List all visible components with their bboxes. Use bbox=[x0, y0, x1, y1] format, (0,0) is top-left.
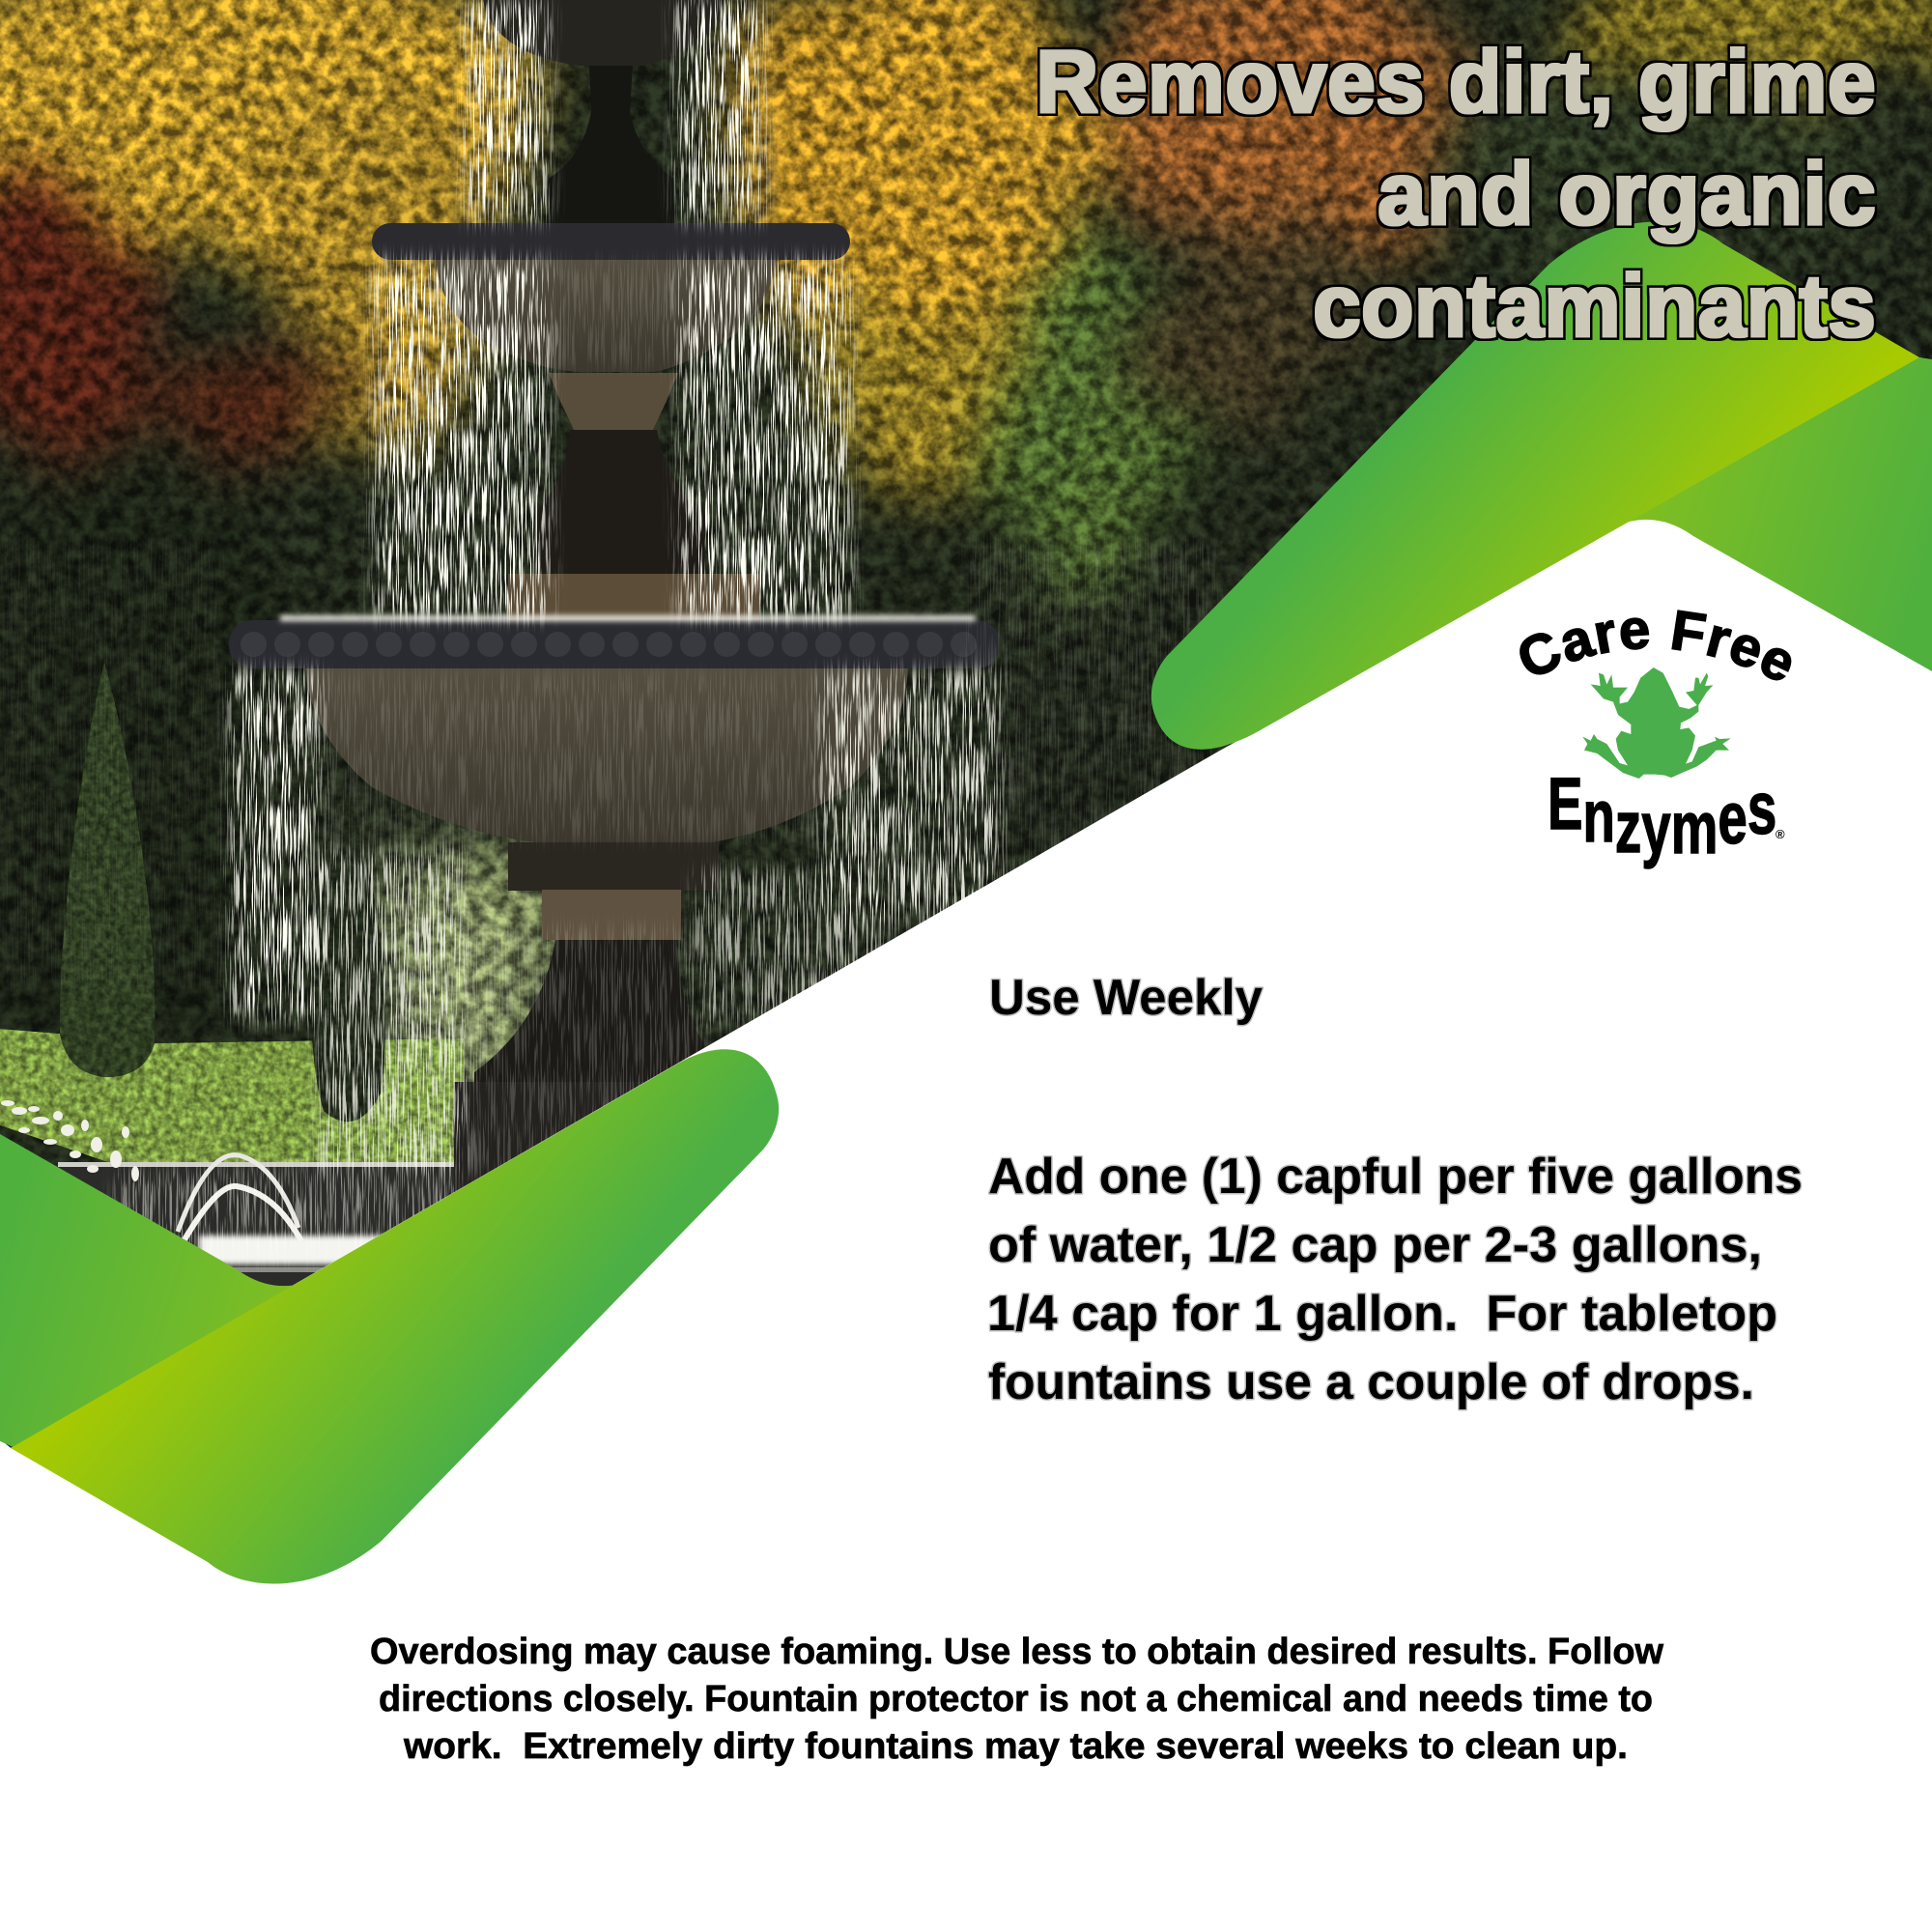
dosage text: of water, 1/2 cap per 2-3 gallons, bbox=[988, 1217, 1762, 1273]
front shape bbox=[11, 1049, 779, 1584]
usage instructions bbox=[987, 970, 1803, 1410]
back shape bbox=[1606, 352, 1932, 671]
pool bbox=[54, 1152, 454, 1286]
front shape bbox=[1151, 221, 1919, 750]
logo text: Enzymes: Enzymes bbox=[1548, 763, 1776, 869]
cypress tree bbox=[60, 662, 156, 1077]
middle rim bbox=[372, 223, 850, 260]
neck bbox=[508, 842, 719, 891]
falling water streaks bbox=[0, 0, 1217, 1256]
footer caution note: directions closely. Fountain protector is not a chemical and needs time to bbox=[379, 1679, 1653, 1719]
middle pedestal bbox=[549, 373, 678, 432]
footer caution note bbox=[370, 1632, 1663, 1767]
lower bowl bbox=[305, 667, 908, 842]
lower rim bbox=[229, 620, 1000, 668]
middle bowl bbox=[434, 256, 776, 372]
photo: autumn garden with tiered fountain bbox=[0, 0, 1932, 1448]
footer caution note: Overdosing may cause foaming. Use less to obtain desired results. Follow bbox=[370, 1632, 1663, 1672]
rim highlight bbox=[280, 615, 976, 621]
use weekly heading: Use Weekly bbox=[989, 970, 1263, 1026]
lower left green accent bbox=[0, 1049, 779, 1584]
upper stem bbox=[549, 66, 674, 224]
registered mark: ® bbox=[1776, 827, 1785, 841]
fountain bbox=[229, 0, 1000, 1208]
lower pedestal bbox=[542, 890, 681, 940]
rim beading bbox=[253, 632, 978, 657]
plinth bbox=[454, 1082, 724, 1208]
dosage text: 1/4 cap for 1 gallon. For tabletop bbox=[987, 1286, 1777, 1342]
dosage text: Add one (1) capful per five gallons bbox=[988, 1149, 1803, 1205]
textured garden elements bbox=[0, 662, 464, 1165]
title: Removes dirt, grime bbox=[1036, 33, 1876, 131]
icon: green frog bbox=[1582, 668, 1731, 779]
dosage text bbox=[987, 1149, 1803, 1410]
foliage background bbox=[0, 0, 1932, 1448]
title: and organic bbox=[1378, 145, 1876, 243]
dosage text: fountains use a couple of drops. bbox=[988, 1354, 1754, 1410]
footer caution note: work. Extremely dirty fountains may take several weeks to clean up. bbox=[403, 1726, 1628, 1767]
lawn bbox=[0, 1029, 464, 1165]
flared base bbox=[474, 940, 719, 1087]
title bbox=[1036, 33, 1876, 355]
logo text: Care Free: Care Free bbox=[1520, 610, 1791, 680]
upper right green accent bbox=[1151, 221, 1932, 750]
dark stem bbox=[535, 430, 705, 576]
back shape bbox=[0, 1134, 324, 1454]
dark tree behind water bbox=[311, 792, 385, 1122]
title: contaminants bbox=[1313, 257, 1876, 355]
lower pedestal block bbox=[508, 574, 759, 622]
left water jet droplets bbox=[1, 1100, 139, 1181]
logo: Care Free Enzymes bbox=[1520, 610, 1791, 869]
top bowl bbox=[483, 0, 724, 66]
